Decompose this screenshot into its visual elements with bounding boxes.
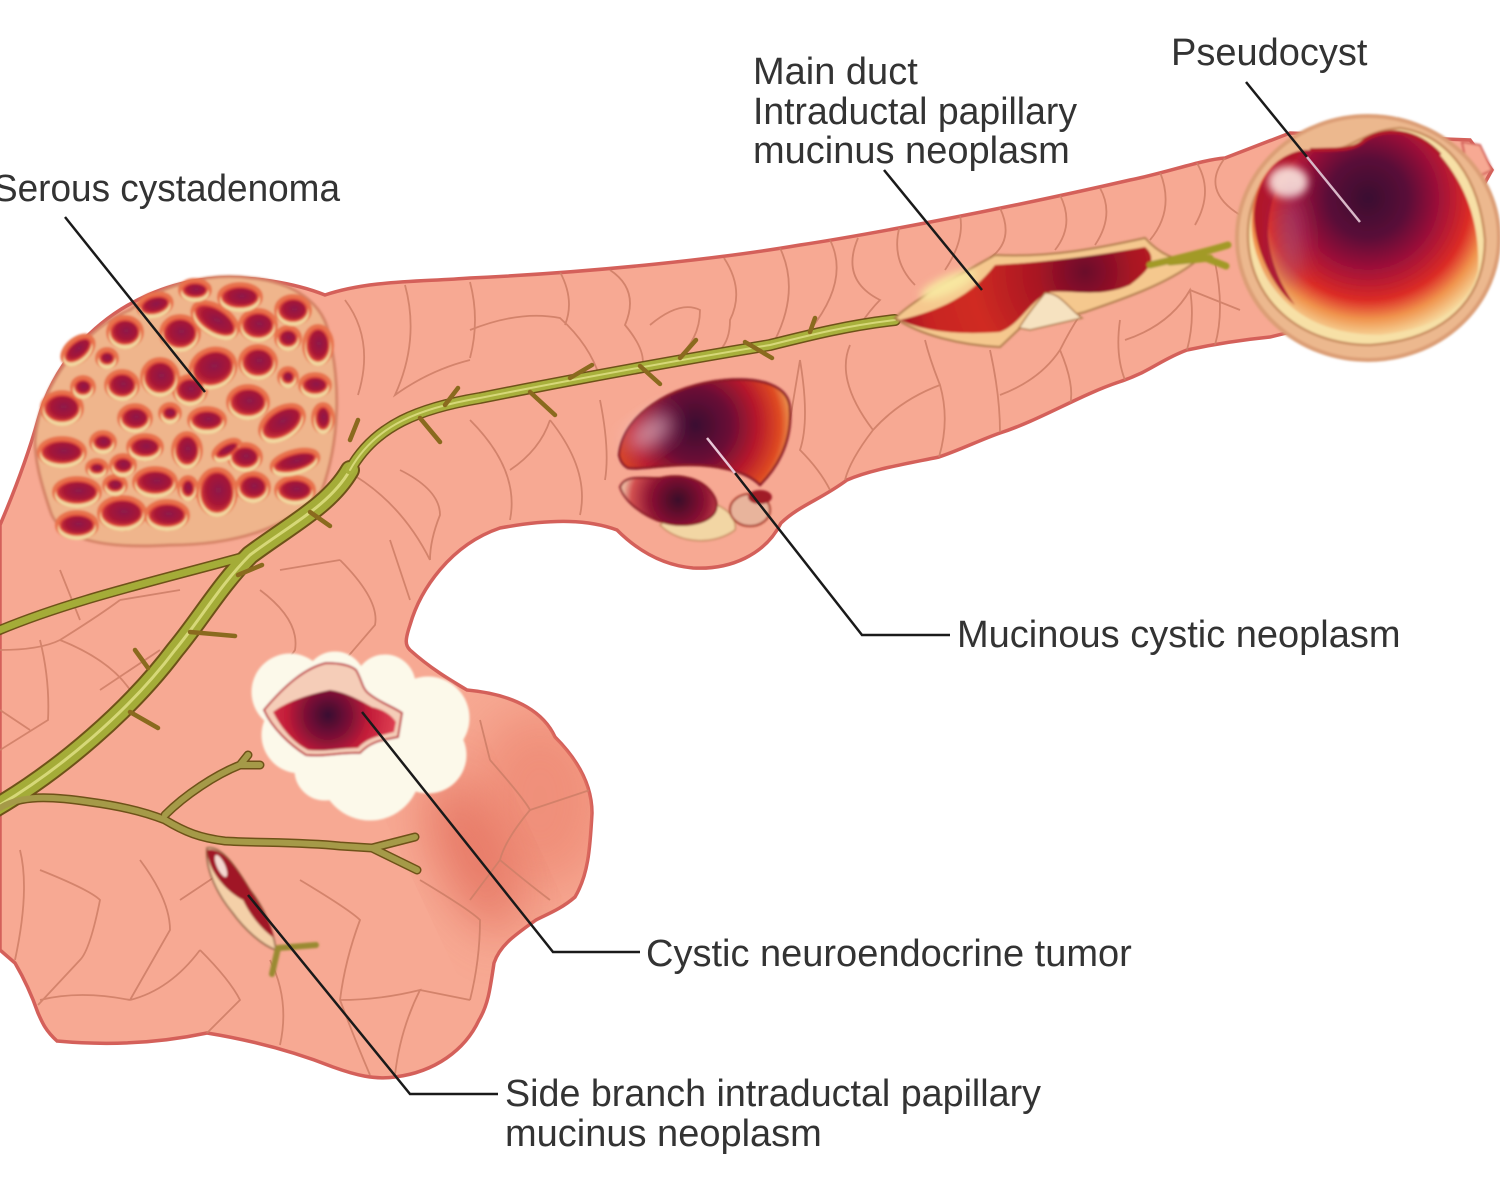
- side branch intraductal lesion: [207, 848, 316, 974]
- label: side branch intraductal papillary mucinus neoplasm: Side branch intraductal papillary: [505, 1073, 1041, 1115]
- lobule lines: [0, 158, 1240, 1075]
- label: main duct intraductal papillary mucinus neoplasm: Intraductal papillary: [753, 91, 1077, 133]
- mucinous cystic neoplasm lesion: [619, 379, 790, 541]
- leader lines: [65, 82, 1360, 1094]
- label: main duct intraductal papillary mucinus neoplasm: mucinus neoplasm: [753, 130, 1070, 172]
- label: serous cystadenoma: Serous cystadenoma: [0, 168, 341, 210]
- pancreas body: [0, 133, 1492, 1078]
- main duct lesion: [895, 238, 1228, 347]
- label: mucinous cystic neoplasm: Mucinous cystic neoplasm: [957, 614, 1401, 656]
- label: main duct intraductal papillary mucinus neoplasm: Main duct: [753, 51, 918, 93]
- pancreatic duct: [0, 318, 895, 870]
- label: cystic neuroendocrine tumor: Cystic neuroendocrine tumor: [646, 933, 1132, 975]
- serous cystadenoma lesion: [35, 277, 337, 546]
- label: pseudocyst: Pseudocyst: [1171, 32, 1368, 74]
- pseudocyst lesion: [1237, 116, 1499, 360]
- cystic neuroendocrine tumor lesion: [252, 652, 469, 820]
- label: side branch second line: mucinus neoplasm: [505, 1113, 822, 1155]
- duct spines: [130, 318, 815, 728]
